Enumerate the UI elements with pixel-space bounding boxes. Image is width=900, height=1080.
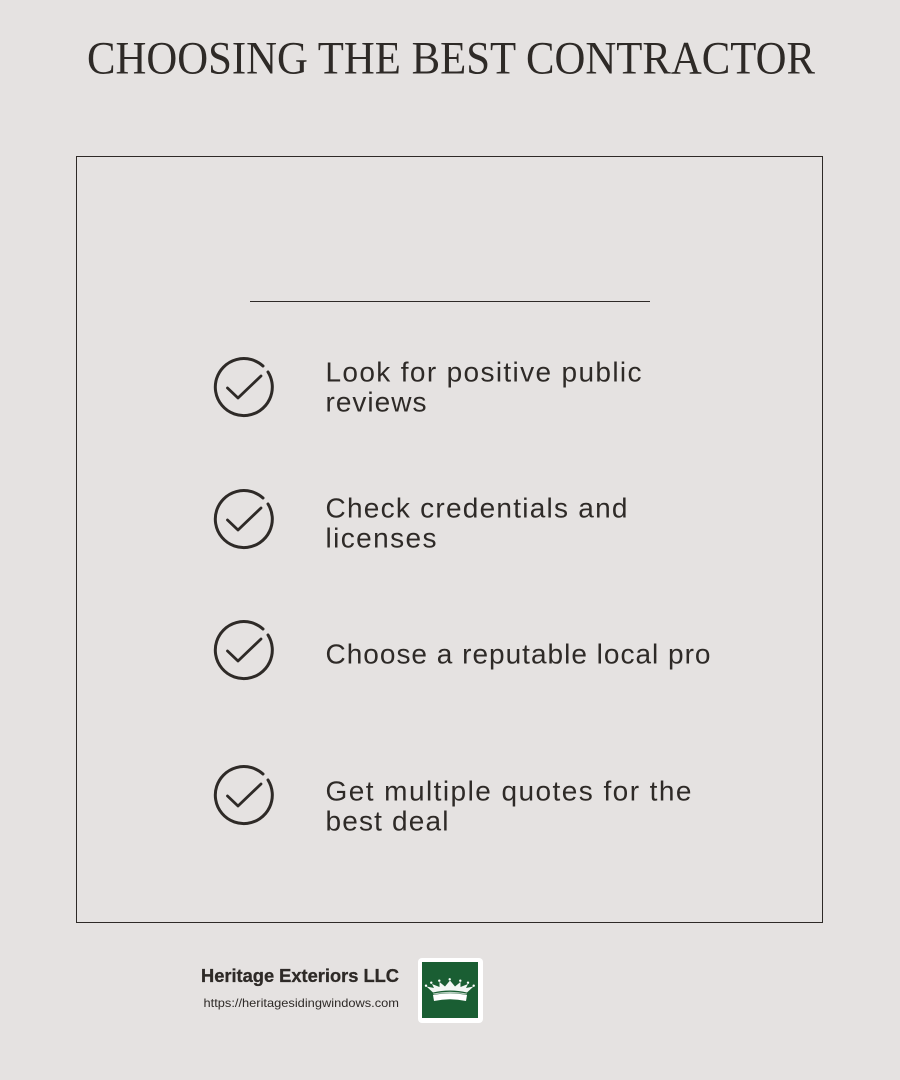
text: item 1 xyxy=(326,356,642,418)
icon: crown xyxy=(425,978,475,1001)
text: item 2: licenses xyxy=(326,522,436,554)
logo: crown badge xyxy=(418,958,483,1023)
checklist item 1 xyxy=(215,356,642,418)
text: item 2 xyxy=(326,492,628,554)
text: item 1: reviews xyxy=(326,386,426,418)
icon: check circle 4 xyxy=(215,767,272,824)
text: item 1: Look for positive public xyxy=(326,356,642,388)
text: item 2: Check credentials and xyxy=(326,492,628,524)
icon: check circle 2 xyxy=(215,491,272,548)
title: CHOOSING THE BEST CONTRACTOR xyxy=(87,32,816,84)
text: item 3: Choose a reputable local pro xyxy=(326,638,710,670)
footer: company name: Heritage Exteriors LLC xyxy=(201,966,399,986)
icon: check circle 1 xyxy=(215,359,272,416)
checklist item 4 xyxy=(215,767,692,836)
panel: checklist frame xyxy=(76,156,822,922)
checklist item 3 xyxy=(215,622,710,679)
footer: website url: https://heritagesidingwindows.com xyxy=(204,996,399,1010)
text: item 4: best deal xyxy=(326,806,448,836)
text: item 4 xyxy=(326,776,692,836)
icon: check circle 3 xyxy=(215,622,272,679)
checklist item 2 xyxy=(215,491,628,554)
text: item 4: Get multiple quotes for the xyxy=(326,776,692,806)
